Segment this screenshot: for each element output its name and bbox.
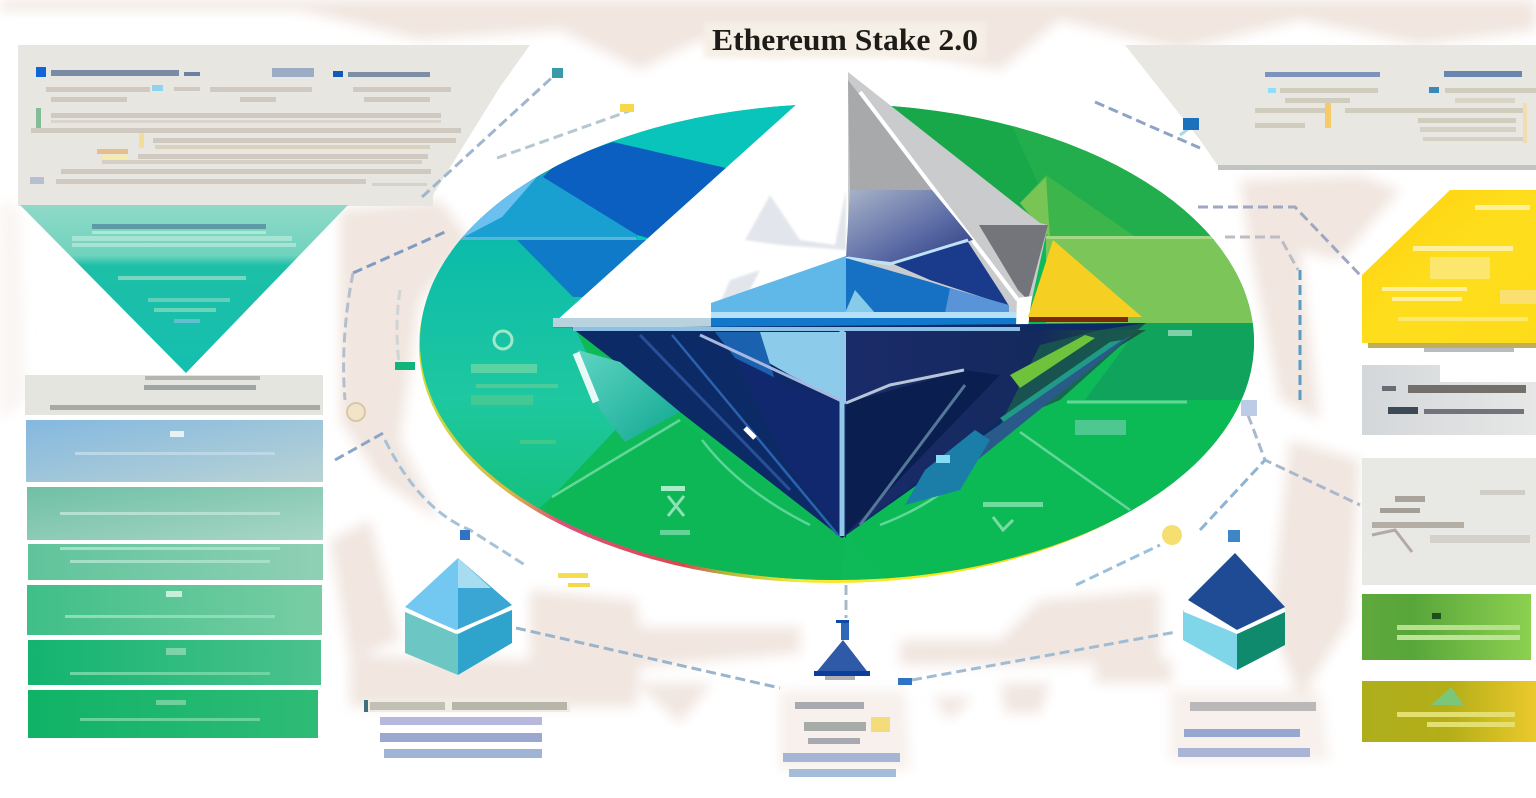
icon: right pyramid block	[1183, 553, 1285, 670]
panel: olive note	[1362, 681, 1536, 742]
disc rim	[419, 109, 1247, 583]
list header	[25, 375, 323, 415]
glass reflection right	[905, 430, 990, 505]
tier 5	[28, 640, 321, 685]
diamond blue-gray facet	[846, 190, 973, 262]
panel: top-left summary	[18, 45, 530, 206]
panel: gray note	[1362, 365, 1536, 435]
text block: right pyramid caption	[1178, 702, 1316, 757]
diamond highlights	[640, 330, 965, 536]
disc green dividers	[552, 402, 1187, 525]
icon: left pyramid block	[405, 558, 512, 675]
tier 6	[28, 690, 318, 738]
glass reflection left	[578, 350, 680, 442]
panel: light chart note	[1362, 458, 1536, 585]
disc icons and labels	[471, 330, 1192, 535]
icon: small blue connector node	[1183, 118, 1199, 130]
title: Ethereum Stake 2.0	[712, 22, 978, 57]
panel: green note	[1362, 594, 1531, 660]
icon: center pyramid	[814, 620, 870, 680]
panel: yellow callout	[1362, 190, 1536, 352]
text block: center pyramid caption	[783, 702, 900, 777]
diamond yellow facet	[1028, 240, 1142, 317]
diamond upper white facet	[555, 72, 848, 322]
diamond central band	[711, 312, 1016, 327]
tier 4	[27, 585, 322, 635]
connector nodes	[347, 68, 1257, 685]
top-right panel	[1125, 45, 1536, 170]
disc segments	[400, 95, 1260, 600]
diamond lower navy	[572, 323, 1146, 538]
diamond upper shading	[715, 190, 846, 315]
tier 2	[27, 487, 323, 540]
diamond white gap	[1016, 296, 1032, 327]
text block: left pyramid caption	[364, 698, 570, 758]
panel: inverted teal triangle	[20, 205, 348, 373]
diamond light gray backing	[848, 72, 1048, 318]
ethereum disc	[400, 72, 1260, 600]
diamond navy band	[891, 242, 1009, 306]
ethereum diamond	[553, 72, 1146, 538]
diamond gray facet	[848, 80, 934, 190]
diamond mid blue	[846, 258, 1009, 313]
panel: left tiered list	[25, 375, 323, 738]
tier 3	[28, 544, 323, 580]
tier 1	[26, 420, 323, 482]
diamond left band	[553, 318, 713, 327]
diamond green streak	[1000, 323, 1146, 425]
dotted connectors	[335, 72, 1360, 688]
diamond dark gray block	[979, 225, 1048, 300]
diamond light blue	[711, 256, 846, 313]
